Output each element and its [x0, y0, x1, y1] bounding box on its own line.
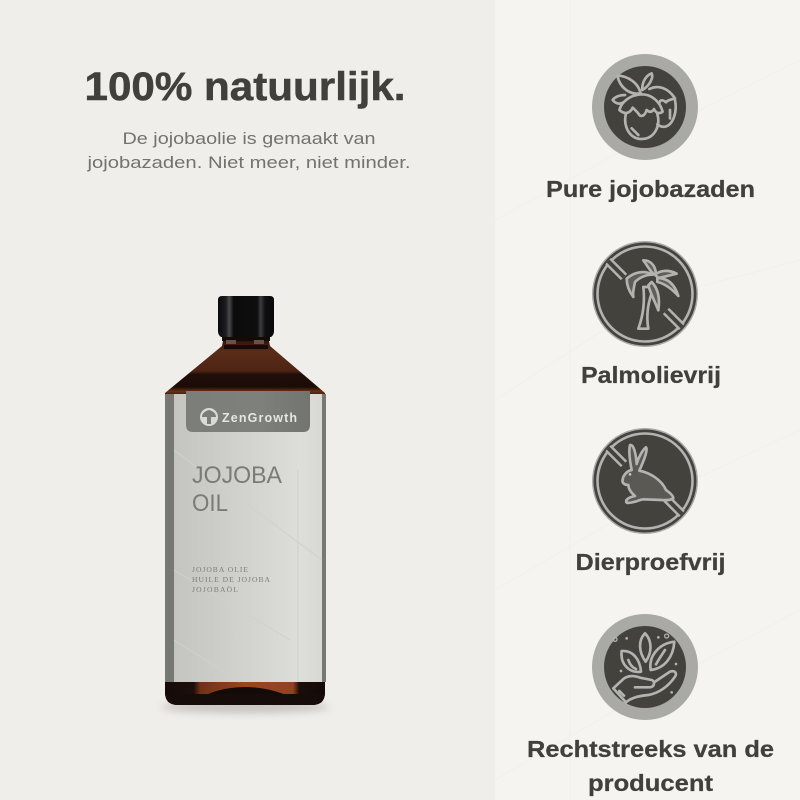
feature: rechtstreeks van de producent	[527, 614, 774, 796]
bottle cap	[218, 296, 274, 337]
right panel background	[495, 0, 800, 800]
product languages: JOJOBAÖL	[192, 585, 238, 594]
product name: OIL	[192, 490, 228, 517]
brand tab	[186, 391, 310, 432]
label: producent	[588, 770, 713, 796]
intro text: De jojobaolie is gemaakt van	[122, 129, 376, 148]
label	[165, 394, 326, 682]
icon: no rabbit	[592, 428, 698, 534]
product languages: HUILE DE JOJOBA	[192, 575, 271, 584]
label: Palmolievrij	[581, 362, 721, 388]
intro text: jojobazaden. Niet meer, niet minder.	[86, 153, 410, 172]
intro text	[86, 129, 410, 172]
title: 100% natuurlijk.	[84, 65, 406, 109]
brand logo	[200, 408, 218, 426]
bottle glass	[165, 336, 325, 705]
icon: jojoba seeds	[592, 54, 698, 160]
product languages: JOJOBA OLIE	[192, 565, 248, 574]
label: Dierproefvrij	[576, 549, 726, 575]
icon: plant in hand	[592, 614, 698, 720]
label	[527, 736, 774, 796]
label: Pure jojobazaden	[546, 176, 755, 202]
label: Rechtstreeks van de	[527, 736, 774, 762]
product name	[192, 462, 282, 517]
brand name: ZenGrowth	[222, 411, 297, 425]
product languages	[192, 565, 271, 594]
feature: palmolievrij	[581, 241, 721, 388]
icon: no palm tree	[592, 241, 698, 347]
product name: JOJOBA	[192, 462, 282, 489]
bottle base	[165, 680, 325, 705]
feature: pure jojobazaden	[546, 54, 755, 202]
product bottle	[161, 296, 329, 713]
feature: dierproefvrij	[576, 428, 726, 575]
